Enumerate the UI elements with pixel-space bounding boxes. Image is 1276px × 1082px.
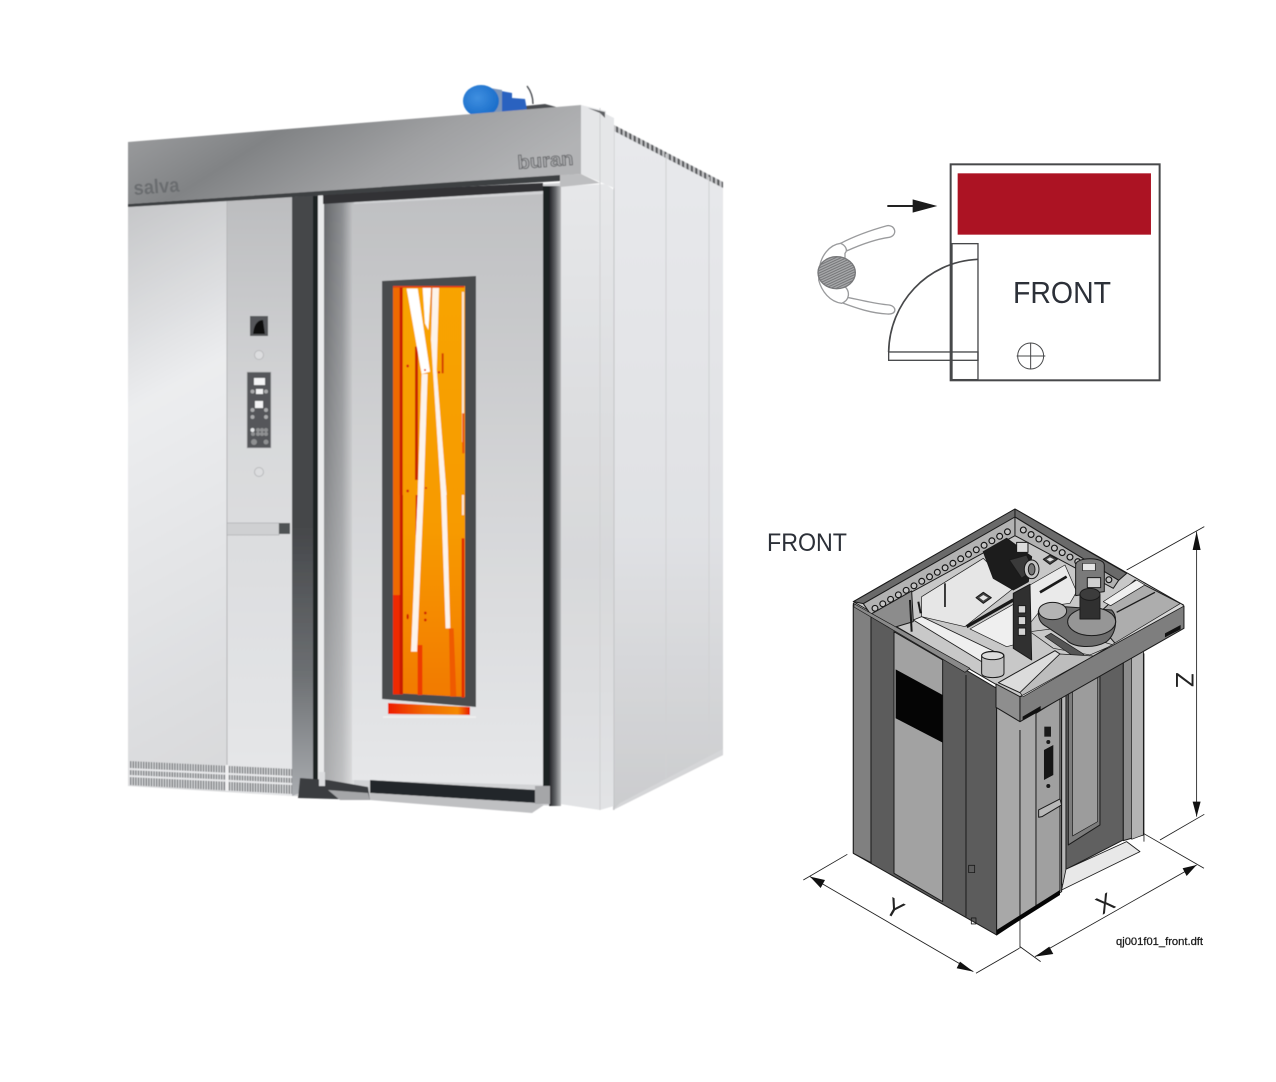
dimension lines [803,527,1204,973]
icon: blue fan motor [463,85,560,117]
window frame [382,276,476,707]
dimension label Y: Y [880,893,909,925]
icon: upper button [254,350,264,360]
label: FRONT on floor plan: FRONT [1013,275,1111,310]
floor vent grille [129,761,292,794]
junction box [976,592,991,603]
label: FRONT above isometric drawing: FRONT [767,529,847,557]
icon: operator seen from above [818,226,895,314]
top motor group [983,538,1057,590]
slotted rail [1045,633,1084,659]
open door leaf [889,352,978,360]
roof with machinery [853,509,1183,698]
door and window [1062,662,1123,872]
icon: lower button [254,468,264,476]
panel: left control wall [128,197,292,796]
isometric oven drawing [803,509,1204,973]
dimension label X: X [1091,887,1120,920]
glass [393,286,465,697]
ladder support [1013,584,1032,660]
icon: selector switch [250,316,268,336]
door swing arc [889,259,978,352]
hood front band [996,603,1184,722]
roof strips at right [1093,580,1183,645]
Y dimension [803,854,1019,973]
control panel [247,372,271,448]
interior plates [871,558,1077,662]
circle marker [1017,343,1045,369]
rim with holes [853,509,1127,614]
oven outline [951,164,1160,380]
red oven chamber [958,173,1151,235]
door recess [952,244,978,380]
Z dimension [1127,527,1204,840]
oven controls [227,316,290,535]
front wall [997,650,1143,935]
drawing file name: qj001f01_front.dft [1116,936,1203,948]
brand: buran: buran [517,149,574,174]
panel: oven side wall [613,125,723,810]
silver cylinder [982,651,1004,678]
oven window with glowing interior [382,276,476,717]
oven door [352,194,543,785]
floor plan diagram [818,164,1160,380]
panel: floor ramp [298,772,550,813]
left side wall [853,603,997,935]
direction arrow [887,199,937,213]
panel: door opening and frame [292,183,561,806]
top hood [128,105,614,207]
brand: salva: salva [133,174,181,200]
panel: right front strip [560,125,614,810]
door handle [227,523,290,535]
X dimension [1020,653,1204,962]
lower red glow strip [388,703,470,715]
threshold plate [1062,842,1140,890]
dimension label Z: Z [1170,672,1198,688]
right cylinder [1076,559,1104,596]
oven photo [128,85,723,813]
left rail [854,604,970,672]
blower [1030,588,1116,655]
